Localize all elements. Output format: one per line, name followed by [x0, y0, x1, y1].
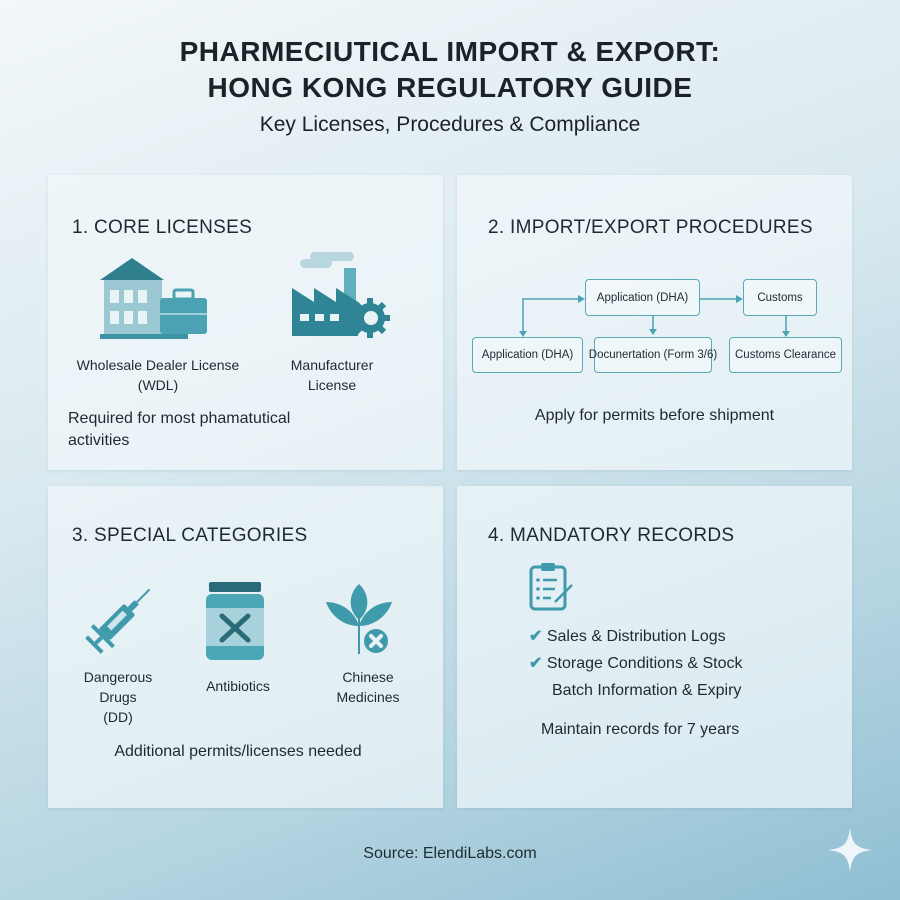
label: chinese medicines — [336, 669, 400, 705]
label: dangerous drugs: Drugs — [99, 689, 137, 705]
heading: core licenses: 1. CORE LICENSES — [72, 217, 252, 238]
label: chinese medicines: Chinese — [342, 669, 394, 685]
step boxes: Customs — [757, 292, 803, 304]
subtitle: Key Licenses, Procedures & Compliance — [260, 113, 640, 136]
panel: procedures — [457, 175, 852, 470]
icon: building with briefcase — [100, 258, 207, 339]
checklist: Batch Information & Expiry — [552, 682, 741, 699]
note: 7 years: Maintain records for 7 years — [541, 721, 739, 738]
step boxes — [472, 279, 842, 373]
title: PHARMECIUTICAL IMPORT & EXPORT: — [180, 36, 720, 67]
icon: clipboard — [530, 563, 573, 610]
label: chinese medicines: Medicines — [336, 689, 400, 705]
note: required: Required for most phamatutical activities — [68, 410, 290, 449]
title — [180, 36, 720, 103]
checklist: ✔ Sales & Distribution Logs — [529, 628, 726, 645]
label: WDL: (WDL) — [138, 377, 178, 393]
icon: antibiotics jar — [206, 582, 264, 660]
label: manufacturer: Manufacturer — [291, 357, 373, 373]
flowchart arrows — [519, 295, 790, 337]
panel: special categories — [48, 486, 443, 808]
icon: factory with gear — [292, 252, 390, 338]
step boxes: Docunertation (Form 3/6) — [589, 349, 717, 361]
heading: procedures: 2. IMPORT/EXPORT PROCEDURES — [488, 217, 813, 238]
heading: records: 4. MANDATORY RECORDS — [488, 525, 734, 546]
icon: herb leaves — [326, 584, 392, 654]
step boxes: Application (DHA) — [482, 349, 573, 361]
panel: mandatory records — [457, 486, 852, 808]
source: Source: ElendiLabs.com — [363, 845, 537, 862]
note: permits: Apply for permits before shipment — [535, 407, 774, 424]
note: permits needed: Additional permits/licenses needed — [114, 743, 362, 760]
step boxes: Application (DHA) — [597, 292, 688, 304]
heading: special categories: 3. SPECIAL CATEGORIES — [72, 525, 307, 546]
icon: syringe — [85, 588, 150, 654]
label: dangerous drugs — [84, 669, 152, 725]
label: dangerous drugs: (DD) — [103, 709, 133, 725]
panel: core licenses — [48, 175, 443, 470]
label: manufacturer — [291, 357, 374, 393]
label: WDL: Wholesale Dealer License — [77, 357, 239, 373]
label: dangerous drugs: Dangerous — [84, 669, 152, 685]
icon: sparkle — [828, 828, 872, 872]
label: antibiotics: Antibiotics — [206, 678, 270, 694]
checklist: ✔ Storage Conditions & Stock — [529, 655, 743, 672]
label: manufacturer: License — [308, 377, 356, 393]
label: WDL — [76, 357, 239, 393]
checklist — [529, 628, 743, 699]
title: HONG KONG REGULATORY GUIDE — [208, 72, 692, 103]
step boxes: Customs Clearance — [735, 349, 836, 361]
